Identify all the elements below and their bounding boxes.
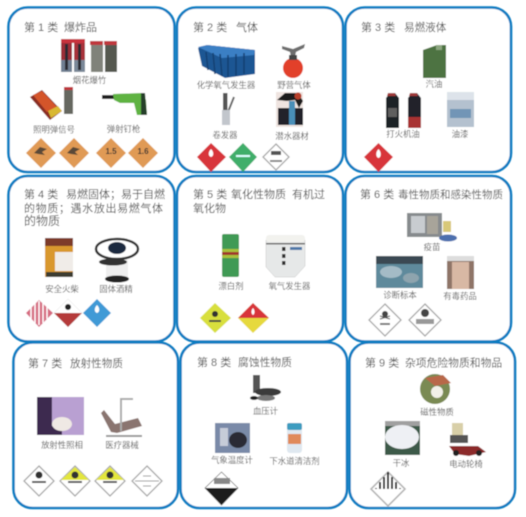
icon: dry ice photo xyxy=(385,421,420,455)
icon: solid alcohol xyxy=(96,239,138,282)
icon: oxygen cylinders xyxy=(198,45,255,78)
heading: class 3: 易燃液体 xyxy=(404,21,447,34)
icon: dental chair xyxy=(101,399,142,437)
heading: class 5: 氧化性物质 xyxy=(231,187,286,201)
heading: class 4: 易燃固体；易于自燃 xyxy=(66,187,165,201)
label: oxygen generator: 化学氧气发生器 xyxy=(197,80,256,90)
panel: class 4 flammable solids xyxy=(8,176,174,342)
panel: class 8 corrosives xyxy=(180,342,347,508)
label: lighter fluid: 打火机油 xyxy=(386,129,420,139)
icon: drain cleaner xyxy=(287,423,302,453)
heading: class 2: 第 2 类 xyxy=(193,20,227,34)
icon: camping gas stove xyxy=(282,44,305,78)
label: diagnostic specimens: 诊断标本 xyxy=(383,290,417,300)
icon: class 9 diamond xyxy=(371,472,405,506)
panel: class 1 explosives xyxy=(8,8,174,172)
panel: class 5 oxidizers xyxy=(177,176,343,342)
icon: matches xyxy=(45,238,73,277)
heading: class 1: 爆炸品 xyxy=(64,20,97,34)
heading: class 5: 氧化物 xyxy=(193,201,226,215)
heading: class 6: 毒性物质和感染性物质 xyxy=(398,188,503,201)
label: magnetic material: 磁性物质 xyxy=(420,407,454,417)
icon: fireworks xyxy=(61,39,117,72)
heading: class 8: 第 8 类 xyxy=(197,355,231,369)
icon: corrosive diamond xyxy=(205,472,238,505)
icon: nail gun xyxy=(102,93,147,115)
heading: class 6: 第 6 类 xyxy=(360,187,394,201)
label: camping gas: 野营气体 xyxy=(277,80,311,90)
icon: diagnostic specimen photo xyxy=(376,256,423,288)
panel: class 7 radioactive xyxy=(14,342,178,508)
label: matches: 安全火柴 xyxy=(45,284,79,294)
panel: class 3 flammable liquids xyxy=(346,8,511,172)
icon: explosive diamonds: 1.5 xyxy=(105,147,117,156)
icon: toxic diamonds xyxy=(369,304,441,336)
label: hair curler: 卷发器 xyxy=(212,130,238,140)
heading: class 1: 第 1 类 xyxy=(24,20,58,34)
icon: explosive diamonds xyxy=(26,138,158,168)
panel: class 2 gases xyxy=(177,8,343,172)
heading: class 9: 杂项危险物质和物品 xyxy=(405,356,502,370)
label: flare: 照明弹信号 xyxy=(33,124,75,134)
icon: lighter fluid xyxy=(386,93,421,128)
heading: class 9: 第 9 类 xyxy=(365,356,399,370)
icon: flammable liquid diamond xyxy=(364,143,393,172)
heading: class 2: 气体 xyxy=(236,20,258,34)
label: solid alcohol: 固体酒精 xyxy=(99,284,133,294)
icon: hair curler xyxy=(222,93,234,125)
label: diving gear: 潜水器材 xyxy=(275,131,309,141)
icon: class 4 diamonds xyxy=(26,299,111,327)
label: nail gun: 弹射钉枪 xyxy=(107,124,141,134)
label: radiograph: 放射性照相 xyxy=(41,440,83,450)
label: bleach: 漂白剂 xyxy=(218,281,244,291)
label: drain cleaner: 下水道清洁剂 xyxy=(269,456,320,466)
label: thermometer: 气象温度计 xyxy=(211,455,254,465)
icon: electric wheelchair xyxy=(449,423,486,456)
heading: class 5: 第 5 类 xyxy=(193,187,227,201)
panel: class 6 toxic substances xyxy=(346,176,511,342)
label: vaccine: 疫苗 xyxy=(424,242,440,252)
icon: gas diamonds xyxy=(197,143,289,172)
icon: oxidizer diamonds xyxy=(200,303,269,333)
heading: class 7: 第 7 类 xyxy=(28,356,62,370)
heading: class 3: 第 3 类 xyxy=(361,20,395,34)
label: fireworks: 烟花爆竹 xyxy=(73,75,107,85)
heading: class 4: 第 4 类 xyxy=(24,187,58,201)
icon: radioactive diamonds xyxy=(24,466,162,496)
label: dry ice: 干冰 xyxy=(393,458,410,468)
icon: sphygmomanometer xyxy=(250,375,281,401)
heading: class 5: 有机过 xyxy=(292,187,325,201)
icon: jerry can xyxy=(423,45,446,78)
icon: explosive diamonds: 1.6 xyxy=(137,147,149,156)
icon: bleach can xyxy=(222,234,239,277)
label: paint: 油漆 xyxy=(452,129,469,139)
label: electric wheelchair: 电动轮椅 xyxy=(449,459,483,469)
label: medical equipment: 医疗器械 xyxy=(105,440,139,450)
heading: class 4: 的物质 xyxy=(24,213,60,228)
icon: vaccine equipment xyxy=(407,213,457,242)
label: blood pressure meter: 血压计 xyxy=(253,406,279,416)
heading: class 4: 的物质；遇水放出易燃气体 xyxy=(24,201,163,215)
icon: weather thermometer photo xyxy=(215,423,250,453)
label: toxic medicine: 有毒药品 xyxy=(443,291,477,301)
heading: class 7: 放射性物质 xyxy=(70,357,123,370)
icon: diving equipment xyxy=(276,92,303,127)
icon: signal flare xyxy=(30,87,73,120)
icon: paint can xyxy=(447,92,474,127)
icon: oxygen generator box xyxy=(266,235,305,277)
icon: magnetic material xyxy=(420,374,451,404)
icon: toxic medicine photo xyxy=(447,256,474,289)
heading: class 8: 腐蚀性物质 xyxy=(238,355,292,369)
panel: class 9 miscellaneous xyxy=(350,342,515,508)
icon: radiograph photo xyxy=(37,397,84,435)
label: gasoline: 汽油 xyxy=(426,79,442,89)
label: oxygen generator: 氧气发生器 xyxy=(269,281,311,291)
